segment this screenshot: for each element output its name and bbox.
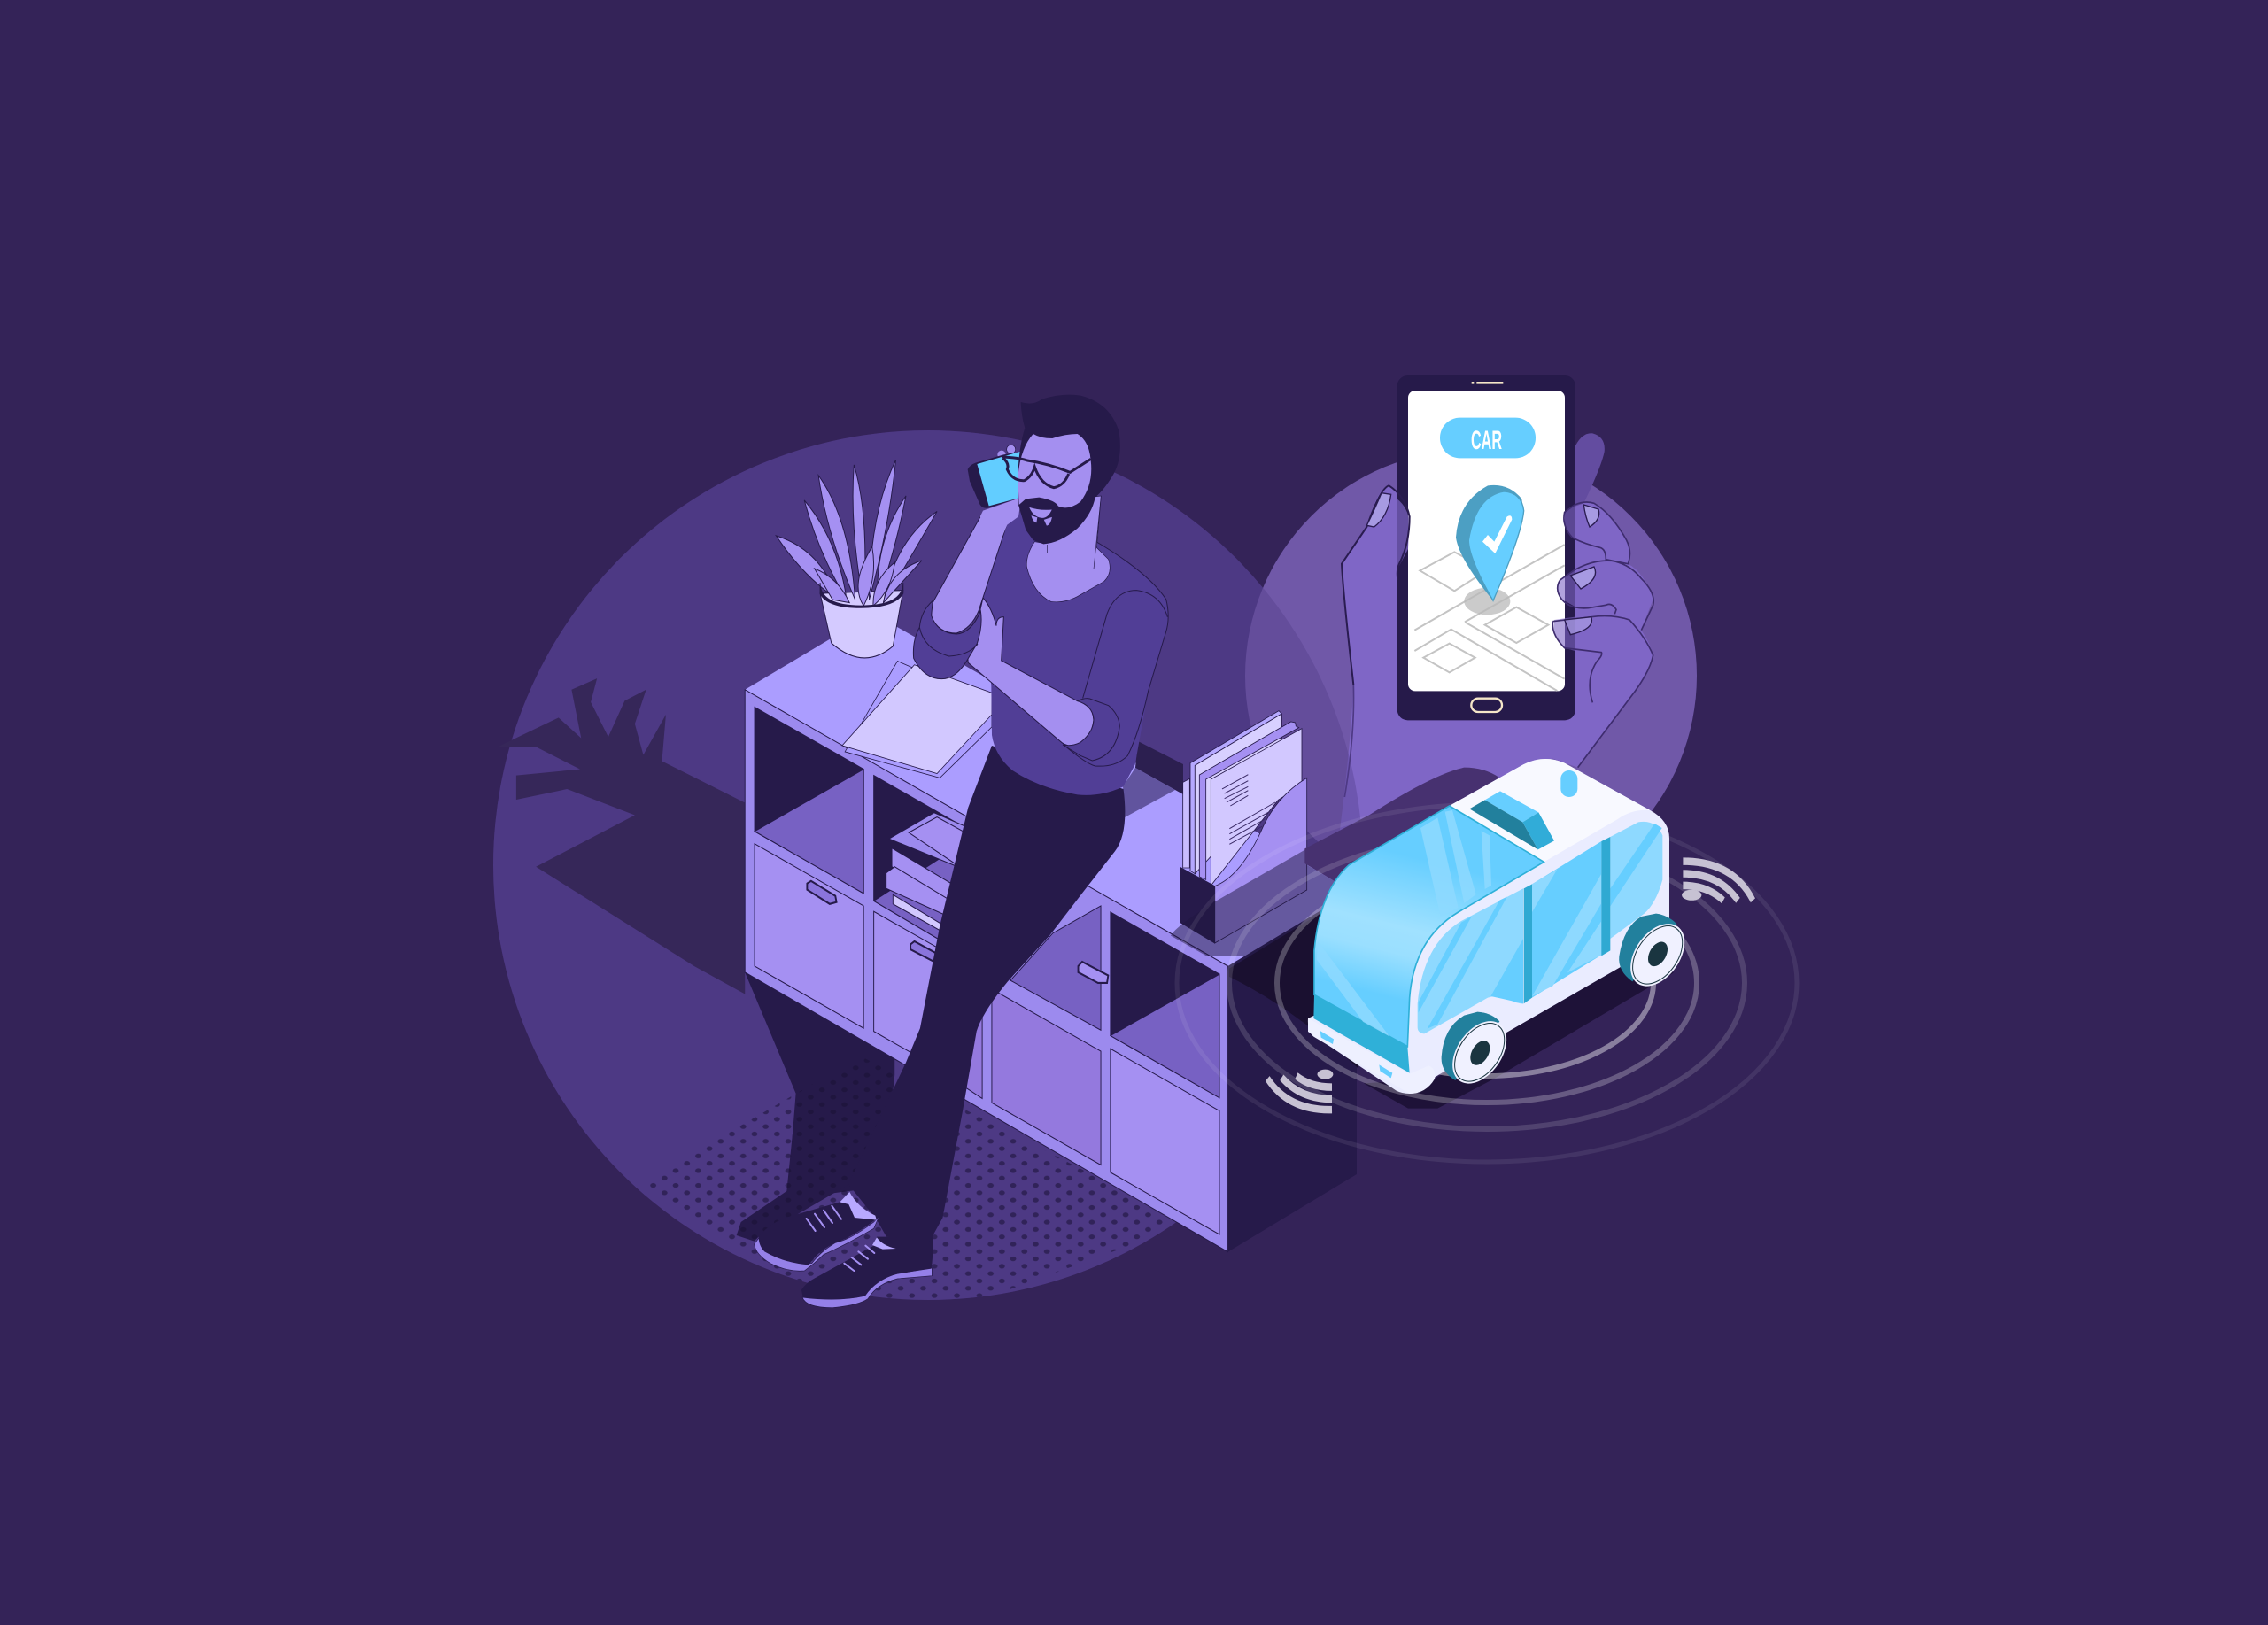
home button bbox=[1471, 699, 1502, 712]
large background circle bbox=[493, 430, 1363, 1300]
mouth and goatee bbox=[1029, 507, 1052, 526]
finger outlines right bbox=[1552, 502, 1653, 768]
head bbox=[968, 395, 1120, 602]
raised finger bbox=[1575, 433, 1605, 507]
sleeve outline bbox=[1064, 542, 1168, 766]
open cell right bbox=[1111, 912, 1219, 1098]
cabinet underside shadow bbox=[745, 954, 1228, 1252]
rear window stripes bbox=[1610, 824, 1662, 906]
door upper center bbox=[1010, 906, 1108, 1030]
sleeve cuff bbox=[913, 600, 981, 679]
pin shadow bbox=[1464, 588, 1510, 615]
box left side bbox=[1180, 867, 1215, 943]
leg shadow on floor bbox=[737, 972, 894, 1242]
hand holding phone bbox=[980, 498, 1021, 540]
front document bbox=[1211, 729, 1302, 886]
front wheel bbox=[1442, 1011, 1518, 1094]
side window stripes bbox=[1419, 897, 1523, 1029]
cabinet top bbox=[745, 614, 1357, 966]
location pin bbox=[1456, 485, 1524, 600]
door left bbox=[755, 844, 863, 1028]
wall band behind cabinet bbox=[1135, 741, 1183, 794]
wall shadow of cabinet and plant bbox=[498, 678, 745, 994]
roof bbox=[1450, 759, 1650, 862]
wrist line bbox=[1344, 685, 1354, 797]
trousers bbox=[848, 746, 1125, 1242]
hair and beard bbox=[1018, 395, 1120, 544]
papers on cabinet bbox=[842, 662, 992, 778]
hand backdrop circle bbox=[1245, 450, 1697, 901]
neck bbox=[1026, 496, 1110, 602]
back folder spine bbox=[1190, 711, 1281, 874]
front bumper bbox=[1308, 1018, 1435, 1094]
glasses bbox=[1002, 457, 1091, 488]
cabinet side face bbox=[1228, 889, 1357, 1252]
shirt bbox=[980, 507, 1168, 795]
back folder face bbox=[1195, 714, 1281, 874]
thumb over phone bbox=[1397, 499, 1410, 569]
car body bbox=[1308, 759, 1669, 1094]
side window middle bbox=[1532, 841, 1601, 998]
pot bbox=[820, 591, 903, 658]
open cell with books bbox=[874, 776, 974, 960]
folder stack bbox=[1199, 722, 1299, 879]
phone at ear bbox=[968, 445, 1021, 508]
darkened side face bbox=[1229, 891, 1358, 1068]
speaker bbox=[1472, 382, 1503, 384]
lower doors bbox=[965, 1013, 982, 1098]
rear wheel bbox=[1619, 914, 1696, 996]
roof sign bbox=[1469, 791, 1554, 849]
door second bbox=[874, 911, 942, 1059]
map lines bbox=[1414, 545, 1565, 691]
car shadow over hand bbox=[1304, 768, 1499, 881]
open cell left bbox=[755, 707, 863, 894]
shadow across cabinet top bbox=[1171, 848, 1366, 956]
pill label bbox=[1440, 418, 1536, 458]
cabinet bbox=[745, 614, 1357, 1252]
pot rim bbox=[820, 583, 903, 607]
man bbox=[755, 395, 1168, 1308]
fingertips over phone bbox=[1553, 505, 1575, 651]
cabinet front frame bbox=[745, 690, 1228, 1252]
big circle tint bbox=[493, 430, 1363, 1300]
side window front bbox=[1418, 888, 1523, 1033]
smartphone bbox=[1342, 375, 1653, 797]
wifi icon right bbox=[1682, 862, 1753, 901]
CAR label: CAR bbox=[1471, 426, 1502, 455]
fingernails bbox=[1366, 493, 1599, 635]
wifi icon left bbox=[1267, 1070, 1333, 1110]
side window rear bbox=[1610, 822, 1662, 939]
leaves bbox=[776, 460, 937, 606]
hand outline left bbox=[1342, 485, 1410, 685]
headlights bbox=[1320, 1031, 1392, 1078]
near forearm and hand bbox=[968, 598, 1094, 747]
windscreen lower bar bbox=[1313, 994, 1410, 1073]
elbow cuff bbox=[1063, 699, 1119, 761]
hand silhouette bbox=[1337, 485, 1653, 850]
phone screen bbox=[1408, 391, 1565, 691]
face bbox=[1018, 434, 1091, 507]
plant in pot bbox=[776, 460, 937, 658]
door lower center bbox=[992, 989, 1101, 1165]
roof sensor bbox=[1560, 770, 1577, 797]
document text lines bbox=[1222, 775, 1275, 844]
back sheets bbox=[1183, 778, 1189, 868]
phone case bbox=[1397, 375, 1575, 720]
neck lines bbox=[1048, 496, 1101, 569]
windscreen reflections bbox=[1317, 810, 1491, 1043]
windscreen bbox=[1314, 806, 1544, 1047]
raised forearm bbox=[932, 512, 1007, 633]
file box bbox=[1180, 711, 1307, 943]
shoe back bbox=[755, 1192, 879, 1271]
signal rings bbox=[1177, 804, 1797, 1162]
dotted floor halftone bbox=[650, 1059, 1163, 1298]
box front bbox=[1215, 778, 1307, 943]
door pillars bbox=[1524, 837, 1610, 1003]
car ground shadow bbox=[1364, 965, 1674, 1109]
middle window reflections bbox=[1532, 870, 1601, 996]
shadow on cabinet top behind man bbox=[1123, 768, 1175, 817]
shoe front bbox=[801, 1237, 933, 1308]
hand holding phone group bbox=[493, 430, 1697, 1300]
door right bbox=[1111, 1049, 1219, 1234]
car bbox=[1308, 759, 1696, 1094]
